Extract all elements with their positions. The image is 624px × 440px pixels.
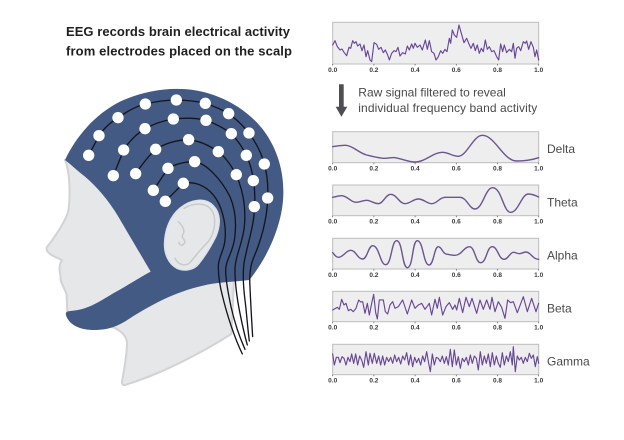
electrodes xyxy=(83,94,273,212)
chart: theta band: 0.6 xyxy=(452,218,461,226)
chart: beta band xyxy=(328,291,572,332)
chart: alpha band: 0.2 xyxy=(369,272,379,279)
chart: gamma band: 1.0 xyxy=(534,378,544,384)
chart: raw signal: 0.2 xyxy=(369,67,379,74)
title xyxy=(66,24,292,58)
chart: raw signal: 0.8 xyxy=(493,67,502,74)
caption: raw signal filtered: Raw signal filtered to reveal xyxy=(358,86,506,100)
chart: delta band: 0.0 xyxy=(328,166,338,172)
chart: theta band: 1.0 xyxy=(534,218,544,226)
chart: gamma band xyxy=(328,344,590,384)
chart: delta band: 0.6 xyxy=(452,166,461,172)
chart: raw signal: 1.0 xyxy=(534,67,544,74)
chart: theta band: 0.2 xyxy=(369,218,379,226)
illustration: head with EEG cap xyxy=(47,89,283,385)
chart: theta band: Theta xyxy=(547,195,578,209)
chart: theta band xyxy=(328,185,578,226)
chart: delta band: 1.0 xyxy=(534,166,544,172)
title: from electrodes placed on the scalp xyxy=(66,44,292,58)
caption: raw signal filtered xyxy=(358,86,537,115)
chart: beta band: 0.4 xyxy=(411,324,420,332)
chart: gamma band: 0.0 xyxy=(328,378,338,384)
chart: alpha band xyxy=(328,238,578,279)
chart: beta band: 0.2 xyxy=(369,324,379,332)
chart: beta band: 1.0 xyxy=(534,324,544,332)
chart: raw signal: 0.0 xyxy=(328,67,338,74)
chart: raw signal: 0.6 xyxy=(452,67,461,74)
chart: alpha band: 0.4 xyxy=(411,272,420,279)
chart: beta band: 0.8 xyxy=(493,324,502,332)
chart: alpha band: Alpha xyxy=(547,248,578,262)
chart: delta band: 0.4 xyxy=(411,166,420,172)
chart: beta band: 0.0 xyxy=(328,324,338,332)
chart: gamma band: 0.2 xyxy=(369,378,379,384)
title: EEG records brain electrical activity xyxy=(66,24,291,39)
chart: alpha band: 0.0 xyxy=(328,272,338,279)
chart: delta band: 0.8 xyxy=(493,166,502,172)
electrode wires xyxy=(89,100,268,354)
chart: alpha band: 1.0 xyxy=(534,272,544,279)
chart: beta band: 0.6 xyxy=(452,324,461,332)
chart: theta band: 0.4 xyxy=(411,218,420,226)
chart: beta band: Beta xyxy=(547,301,572,315)
chart: gamma band: 0.8 xyxy=(493,378,502,384)
arrow: down xyxy=(336,84,347,117)
chart: raw signal xyxy=(328,22,544,74)
ear xyxy=(165,200,219,270)
chart: gamma band: Gamma xyxy=(547,355,590,369)
chart: gamma band: 0.4 xyxy=(411,378,420,384)
chart: theta band: 0.0 xyxy=(328,218,338,226)
EEG cap xyxy=(65,89,283,330)
chart: alpha band: 0.8 xyxy=(493,272,502,279)
chart: delta band: Delta xyxy=(547,142,575,156)
chart: delta band: 0.2 xyxy=(369,166,379,172)
caption: raw signal filtered: individual frequency band activity xyxy=(358,101,537,115)
chart: raw signal: 0.4 xyxy=(411,67,420,74)
chart: gamma band: 0.6 xyxy=(452,378,461,384)
head silhouette xyxy=(47,160,234,385)
chart: delta band xyxy=(328,132,575,172)
chart: theta band: 0.8 xyxy=(493,218,502,226)
chart: alpha band: 0.6 xyxy=(452,272,461,279)
